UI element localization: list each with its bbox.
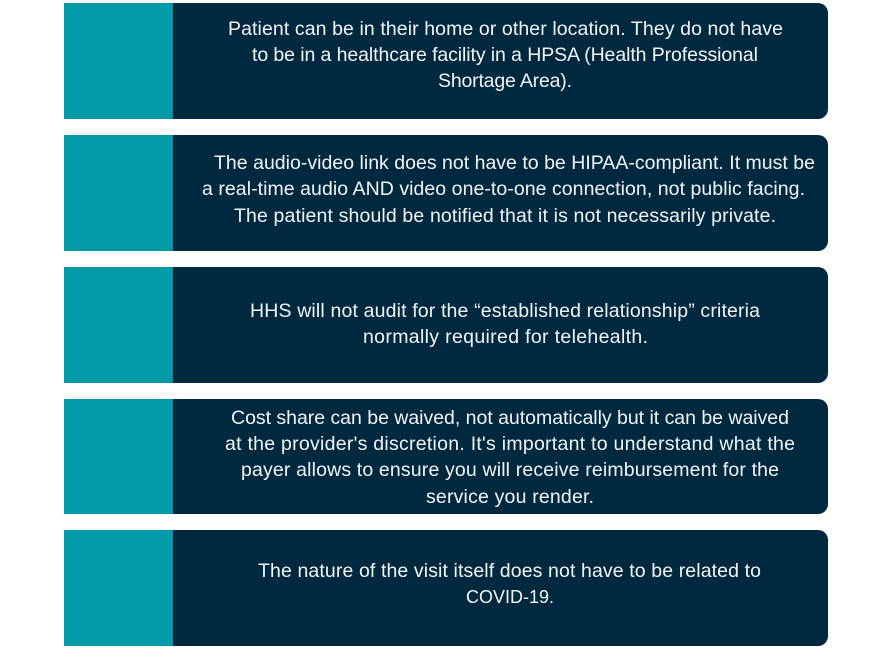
- text: nature of visit: COVID-19.: [466, 587, 554, 607]
- teal block 3: [64, 267, 174, 383]
- text: audio-video link: The patient should be notified that it is not necessarily private.: [234, 205, 776, 227]
- dark card 1: [173, 3, 828, 119]
- text: nature of visit: [258, 560, 761, 607]
- text: patient location: Shortage Area).: [438, 70, 572, 92]
- text: nature of visit: The nature of the visit itself does not have to be related to: [258, 560, 761, 582]
- text: patient location: Patient can be in their home or other location. They do not have: [228, 18, 783, 40]
- dark card 3: [173, 267, 828, 383]
- text: cost share: payer allows to ensure you will receive reimbursement for the: [241, 459, 779, 481]
- dark card 4: [173, 399, 828, 514]
- teal block 1: [64, 3, 174, 119]
- text: patient location: [228, 18, 783, 92]
- dark card 5: [173, 530, 828, 646]
- text: audio-video link: The audio-video link does not have to be HIPAA-compliant. It must be: [214, 152, 815, 174]
- text: cost share: [225, 407, 795, 508]
- text: audio-video link: a real-time audio AND video one-to-one connection, not public facing.: [202, 178, 805, 200]
- dark card 2: [173, 135, 828, 251]
- panel: audio-video link: [64, 135, 828, 251]
- text: established relationship: HHS will not audit for the “established relationship” criteria: [250, 300, 760, 322]
- panel: cost share: [64, 399, 828, 514]
- teal block 2: [64, 135, 174, 251]
- text: established relationship: [250, 300, 760, 348]
- panel: patient location: [64, 3, 828, 119]
- text: established relationship: normally required for telehealth.: [363, 326, 648, 348]
- teal block 4: [64, 399, 174, 514]
- text: patient location: to be in a healthcare facility in a HPSA (Health Professional: [252, 44, 758, 66]
- text: cost share: Cost share can be waived, not automatically but it can be waived: [231, 407, 789, 429]
- panel: established relationship: [64, 267, 828, 383]
- text: cost share: at the provider's discretion. It's important to understand what the: [225, 433, 795, 455]
- panel: nature of visit: [64, 530, 828, 646]
- text: audio-video link: [202, 152, 815, 227]
- text: cost share: service you render.: [426, 486, 594, 508]
- teal block 5: [64, 530, 174, 646]
